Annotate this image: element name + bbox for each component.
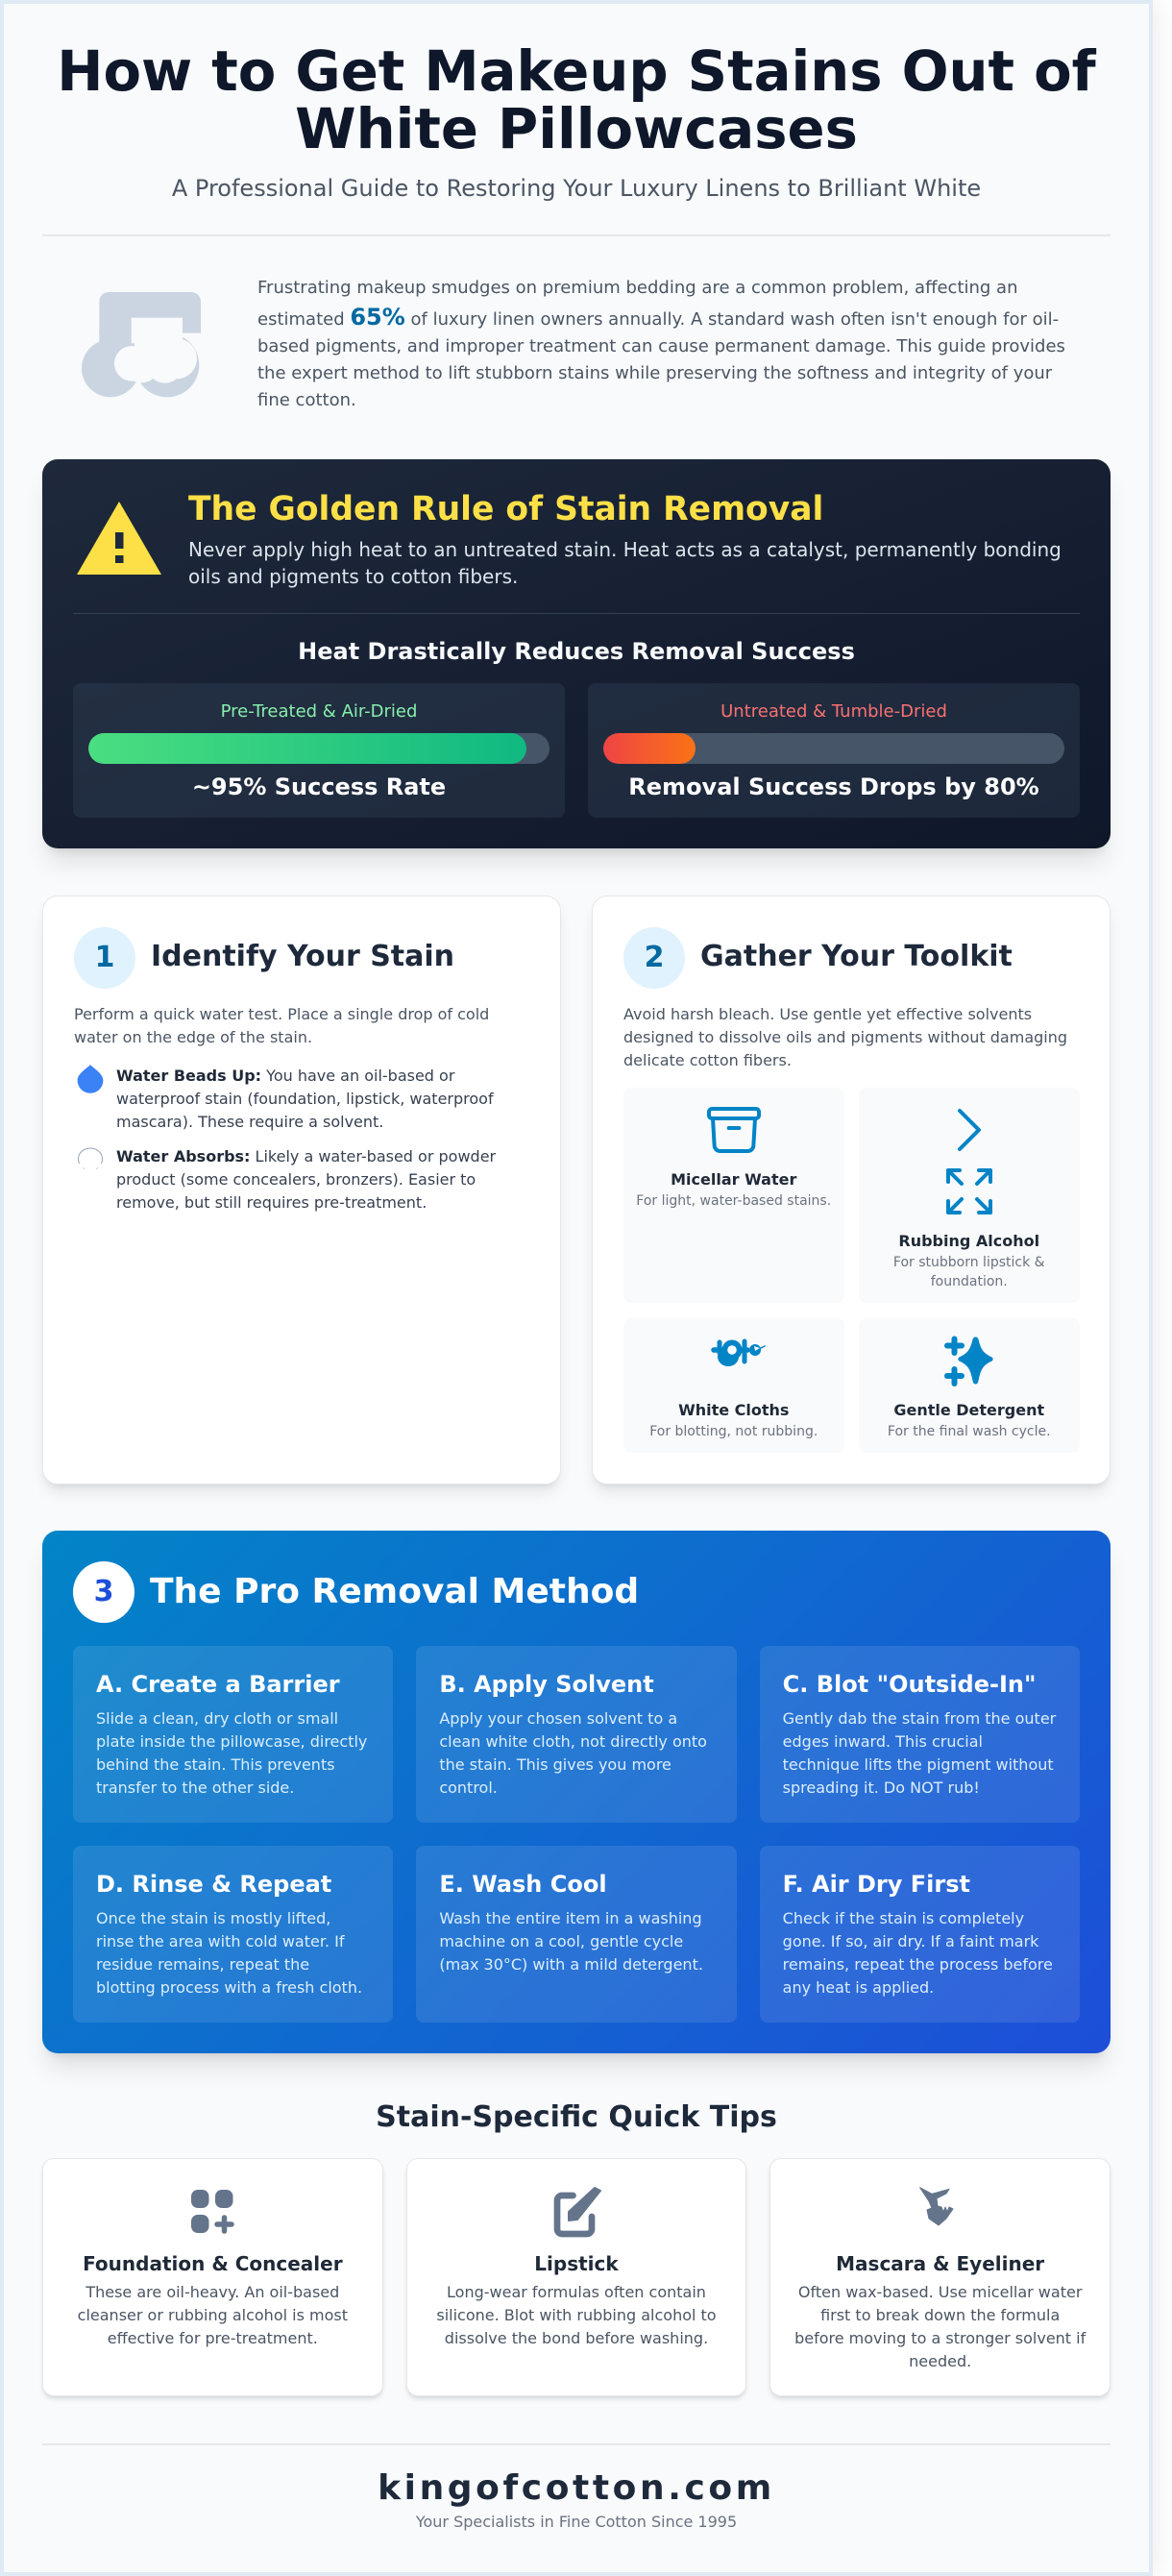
text: Check if the stain is completely [783,1909,1024,1927]
text: edges inward. This crucial [783,1732,983,1751]
label: Pre-Treated & Air-Dried [221,701,417,722]
tip text: effective for pre-treatment. [108,2329,318,2347]
text: control. [439,1779,498,1797]
text: residue remains, repeat the [96,1955,309,1974]
icon: water absorbs ring [78,1147,103,1170]
panel: golden rule [42,459,1111,848]
step intro: delicate cotton fibers. [623,1051,792,1069]
tip: lipstick [406,2158,746,2396]
tip: foundation and concealer [42,2158,383,2396]
intro section [82,278,1065,410]
icon: warning triangle [77,502,161,575]
text [96,1909,362,1997]
step intro: Avoid harsh bleach. Use gentle yet effective solvents [623,1005,1032,1023]
water absorbs text [116,1147,496,1212]
text [439,1709,707,1797]
panel: step 1 identify [42,895,561,1484]
value: Removal Success Drops by 80% [628,773,1039,800]
value: ~95% Success Rate [192,773,446,800]
water beads text: waterproof stain (foundation, lipstick, waterproof [116,1090,494,1108]
tip text: Often wax-based. Use micellar water [798,2283,1082,2301]
step heading: Gather Your Toolkit [700,940,1013,973]
brand name: kingofcotton.com [378,2468,775,2508]
tool name: Rubbing Alcohol [898,1232,1039,1250]
icon: pillow with stain [82,292,201,398]
icon: arrows out [945,1168,993,1214]
chart heading: Heat Drastically Reduces Removal Success [298,638,855,665]
step intro: water on the edge of the stain. [74,1028,312,1046]
water beads text [116,1067,494,1131]
tool note: For blotting, not rubbing. [649,1424,818,1439]
water absorbs text: Water Absorbs: Likely a water-based or powder [116,1147,496,1165]
water absorbs text: product (some concealers, bronzers). Easier to [116,1170,476,1189]
intro text: fine cotton. [257,390,356,410]
step number: 2 [645,941,664,974]
text: machine on a cool, gentle cycle [439,1932,683,1950]
text: blotting process with a fresh cloth. [96,1978,362,1997]
text [783,1709,1057,1797]
golden rule heading: The Golden Rule of Stain Removal [188,490,823,528]
tip text: first to break down the formula [820,2306,1060,2324]
tool name: Micellar Water [671,1170,796,1189]
text: the stain. This gives you more [439,1755,671,1774]
intro text: the expert method to lift stubborn stains while preserving the softness and integrity of your [257,363,1052,383]
tip text [794,2283,1087,2370]
intro text: based pigments, and improper treatment can cause permanent damage. This guide provides [257,336,1065,356]
step number [74,927,135,989]
tool note: foundation. [931,1274,1008,1289]
stat: pre-treated [73,683,565,818]
heading: E. Wash Cool [439,1871,607,1898]
text: any heat is applied. [783,1978,934,1997]
text: plate inside the pillowcase, directly [96,1732,367,1751]
tool: micellar water [623,1088,843,1303]
tip heading: Foundation & Concealer [83,2252,343,2275]
bar: 20% [603,733,1064,764]
footer [42,2443,1111,2539]
step A [73,1646,393,1823]
tool name: Gentle Detergent [893,1401,1044,1419]
icon: water drop [77,1065,104,1093]
tool note [893,1255,1045,1289]
tool note: For light, water-based stains. [636,1193,831,1209]
step intro [74,1005,489,1046]
panel: step 2 toolkit [592,895,1111,1484]
step intro [623,1005,1067,1069]
tip text: silicone. Blot with rubbing alcohol to [436,2306,717,2324]
text: Gently dab the stain from the outer [783,1709,1056,1728]
step C [760,1646,1080,1823]
tip text: dissolve the bond before washing. [445,2329,708,2347]
tip text: Long-wear formulas often contain [447,2283,706,2301]
step heading: The Pro Removal Method [150,1572,639,1611]
heading: D. Rinse & Repeat [96,1871,331,1898]
step D [73,1846,393,2023]
icon: chevron [957,1109,982,1151]
tool name: White Cloths [678,1401,789,1419]
panel: step 3 pro removal method [42,1531,1111,2053]
tip text: needed. [909,2352,971,2370]
golden rule text [188,538,1062,588]
text: behind the stain. This prevents [96,1755,335,1774]
tip text: cleanser or rubbing alcohol is most [78,2306,348,2324]
icon: sparkles [944,1336,993,1386]
text: (max 30°C) with a mild detergent. [439,1955,703,1974]
golden rule text: oils and pigments to cotton fibers. [188,565,518,588]
text: remains, repeat the process before [783,1955,1053,1974]
step E [416,1846,737,2023]
text: Slide a clean, dry cloth or small [96,1709,338,1728]
step intro: Perform a quick water test. Place a single drop of cold [74,1005,489,1023]
text: rinse the area with cold water. If [96,1932,344,1950]
intro text: Frustrating makeup smudges on premium bedding are a common problem, affecting an [257,278,1018,298]
tool: rubbing alcohol [859,1088,1080,1303]
bar: 95% [88,733,549,764]
tool: white cloths [623,1318,843,1453]
subtitle: A Professional Guide to Restoring Your Luxury Linens to Brilliant White [172,175,981,202]
step heading: Identify Your Stain [151,940,454,973]
step B [416,1646,737,1823]
text: transfer to the other side. [96,1779,294,1797]
text: gone. If so, air dry. If a faint mark [783,1932,1038,1950]
title: How to Get Makeup Stains Out of [57,39,1096,104]
text: Apply your chosen solvent to a [439,1709,677,1728]
text: Wash the entire item in a washing [439,1909,702,1927]
icon: pencil square [553,2187,601,2237]
water absorbs text: remove, but still requires pre-treatment. [116,1193,427,1212]
step number: 3 [94,1575,113,1608]
text [96,1709,367,1797]
icon: mascara glyph [919,2187,953,2225]
step number: 1 [95,941,114,974]
tip text: before moving to a stronger solvent if [794,2329,1086,2347]
text: clean white cloth, not directly onto [439,1732,707,1751]
heading: B. Apply Solvent [439,1671,654,1698]
section heading: quick tips: Stain-Specific Quick Tips [376,2100,777,2134]
tip text: These are oil-heavy. An oil-based [85,2283,339,2301]
tip heading: Lipstick [534,2252,619,2275]
tip text [436,2283,717,2347]
tip text [78,2283,348,2347]
water beads text: mascara). These require a solvent. [116,1113,383,1131]
text: Once the stain is mostly lifted, [96,1909,330,1927]
heading: F. Air Dry First [783,1871,970,1898]
text [439,1909,703,1974]
intro text: estimated 65% of luxury linen owners annually. A standard wash often isn't enough for oil- [257,304,1059,331]
water beads text: Water Beads Up: You have an oil-based or [116,1067,454,1085]
header [42,42,1111,236]
tool note: For stubborn lipstick & [893,1255,1045,1270]
stat: untreated [588,683,1080,818]
heading: C. Blot "Outside-In" [783,1671,1036,1698]
title: White Pillowcases [295,97,858,161]
tip heading: Mascara & Eyeliner [836,2252,1044,2275]
text: technique lifts the pigment without [783,1755,1054,1774]
tip: mascara and eyeliner [769,2158,1111,2396]
icon: archive box [707,1107,761,1153]
step number [73,1561,134,1623]
step intro: designed to dissolve oils and pigments without damaging [623,1028,1067,1046]
icon: cloth glyph [711,1339,766,1366]
tool note: For the final wash cycle. [888,1424,1051,1439]
golden rule text: Never apply high heat to an untreated stain. Heat acts as a catalyst, permanently bonding [188,538,1062,561]
step number [623,927,685,989]
step F [760,1846,1080,2023]
icon: squares plus [191,2190,234,2234]
intro text [257,278,1065,410]
tagline: Your Specialists in Fine Cotton Since 1995 [416,2513,737,2531]
heading: A. Create a Barrier [96,1671,340,1698]
tool: gentle detergent [859,1318,1080,1453]
text [783,1909,1053,1997]
text: spreading it. Do NOT rub! [783,1779,980,1797]
label: Untreated & Tumble-Dried [720,701,947,722]
title [57,39,1097,161]
